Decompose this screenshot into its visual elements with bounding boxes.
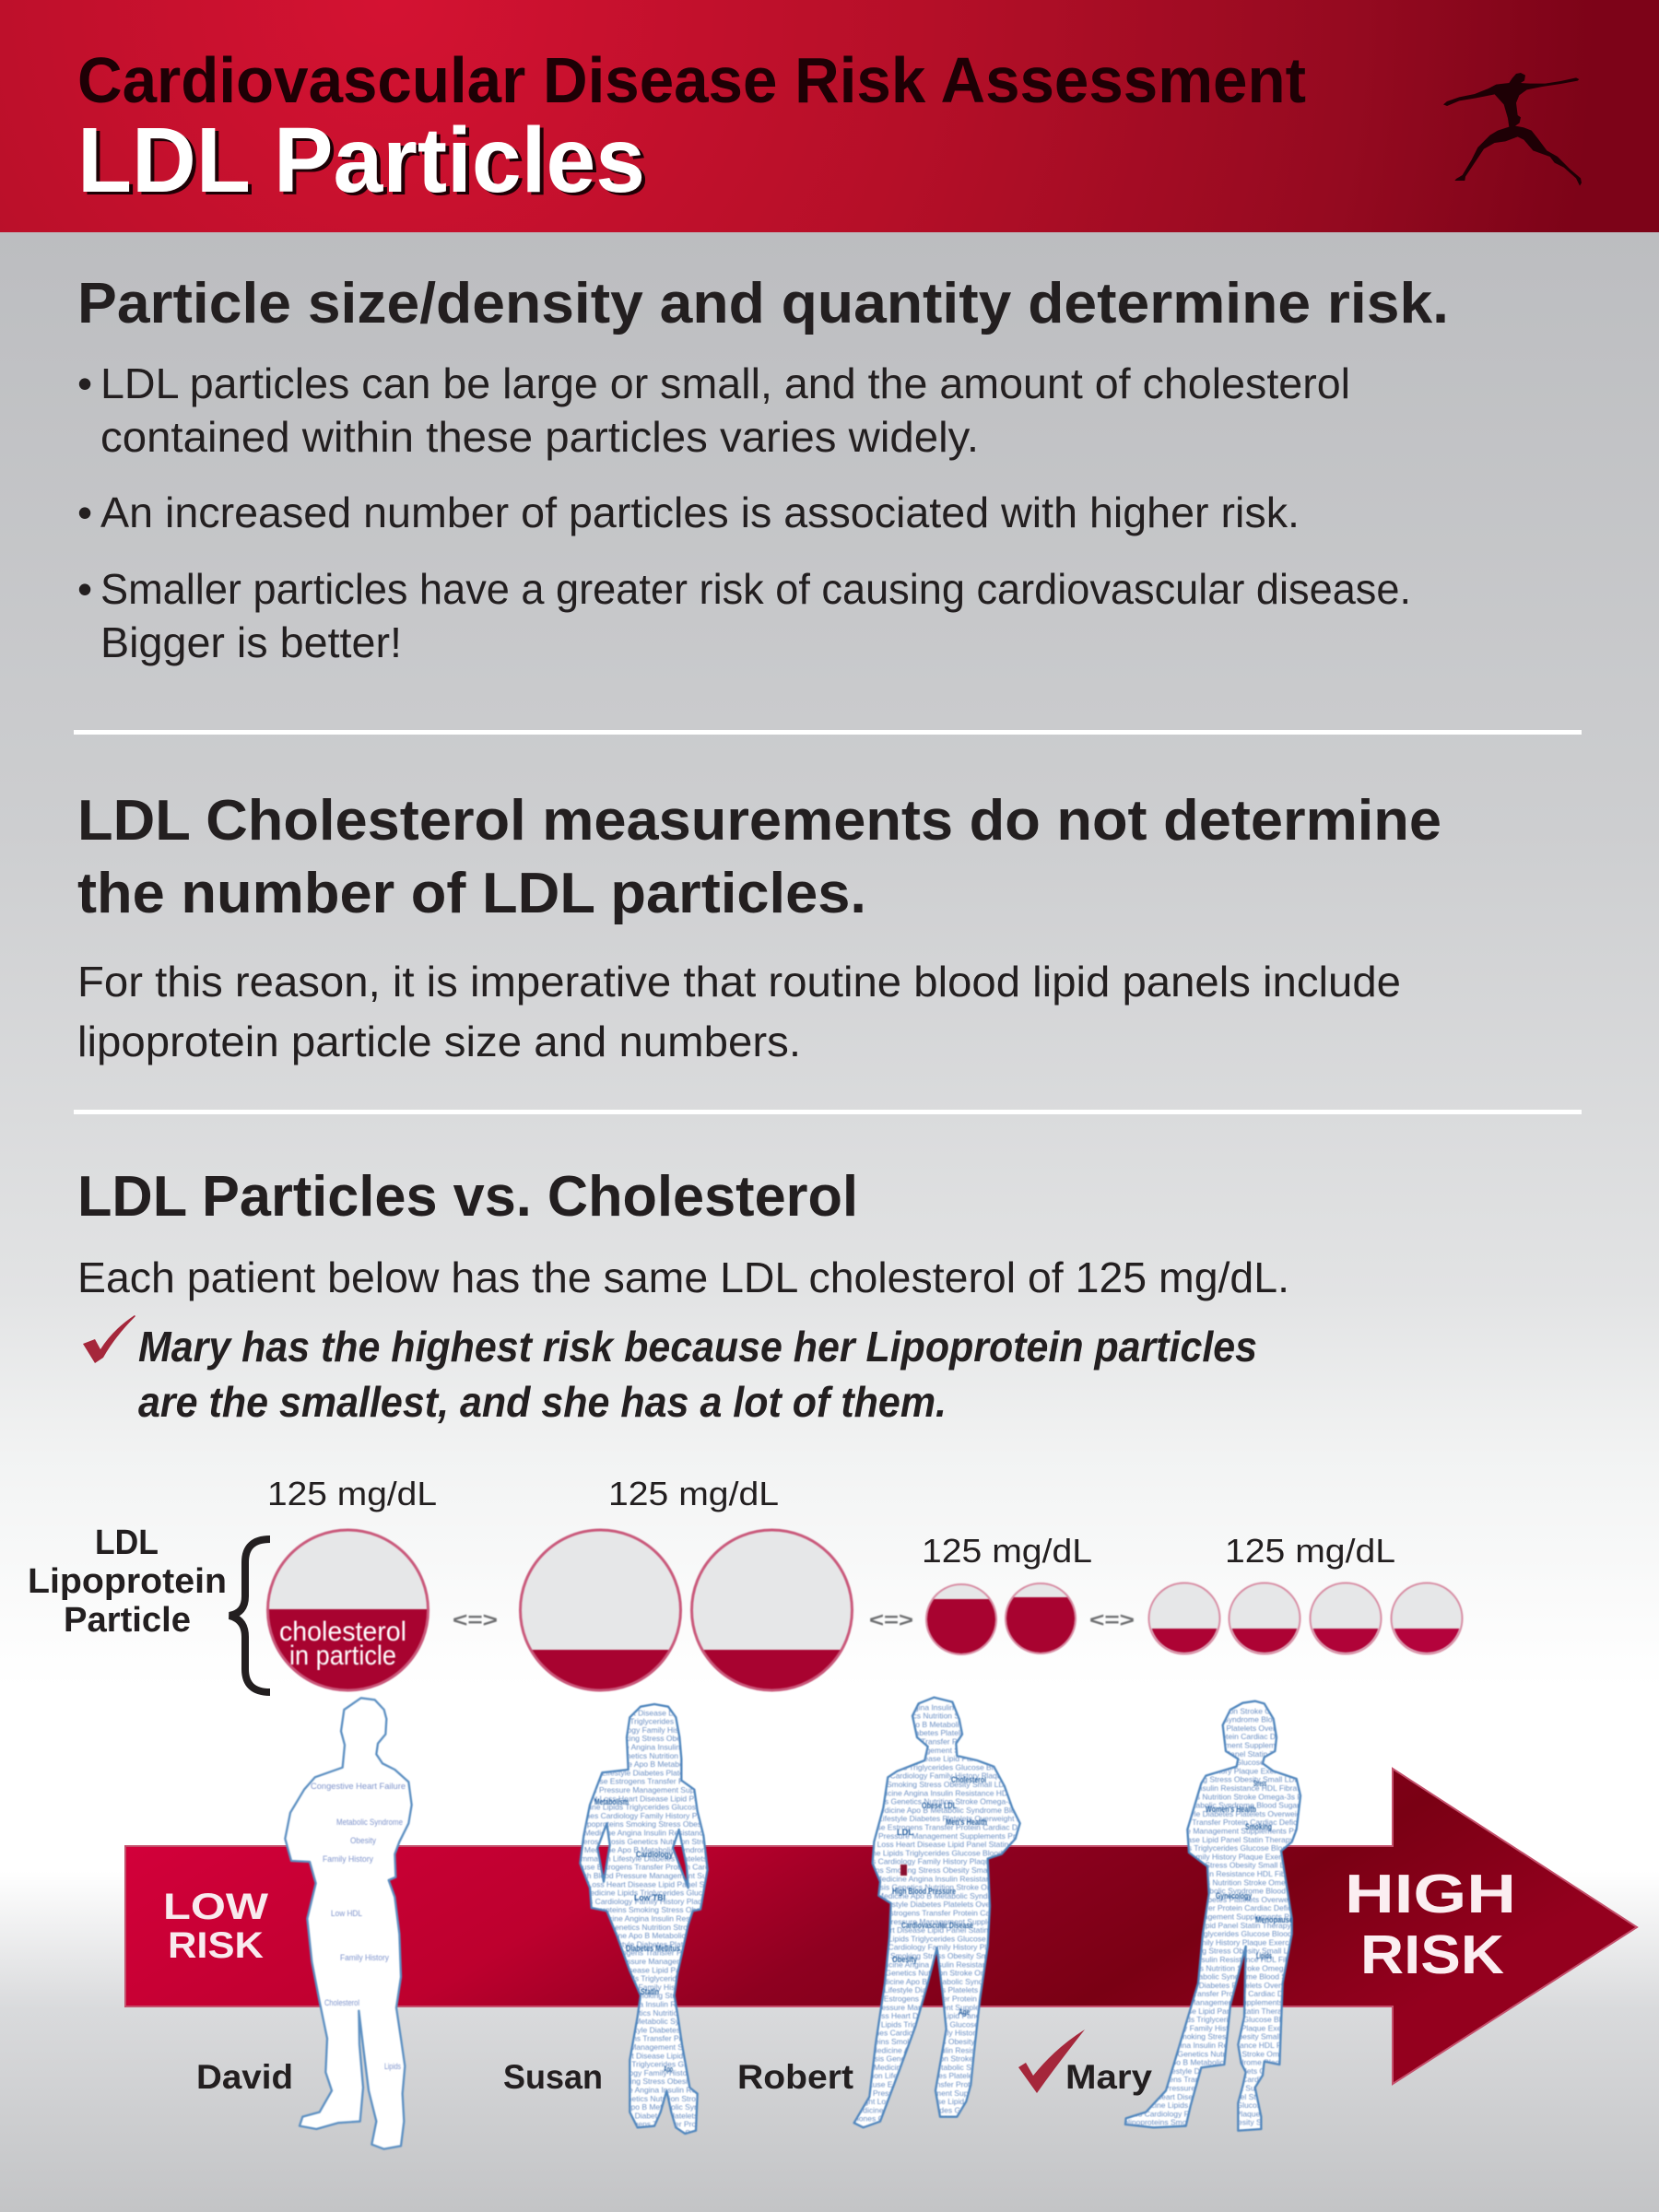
bullet list: • bbox=[77, 488, 92, 536]
figure: Susan silhouette with risk-factor words: Diet Medicine Lipids Triglycerides Glucose Blood Clots bbox=[558, 1717, 747, 1726]
figure: Susan silhouette with risk-factor words: Atherosclerosis Genetics Nutrition Stroke Omega-3s Fat bbox=[561, 2094, 757, 2103]
figure: Robert silhouette with risk-factor words: Weight Loss Heart Disease Lipid Panel Statin Therapy Risk Exercise bbox=[851, 1840, 1089, 1849]
figure: Susan silhouette with risk-factor words: Atherosclerosis Genetics Nutrition Stroke Omega-3s Fat bbox=[560, 1751, 756, 1760]
figure: Robert silhouette with risk-factor words: Atherosclerosis Genetics Nutrition Stroke Omega-3s Fat Statin bbox=[830, 1969, 1047, 1978]
figure: Robert silhouette with risk-factor words: Cholesterol bbox=[951, 1775, 986, 1784]
figure: Mary silhouette with risk-factor words: High Blood Pressure Management Supplements Preventive Care LDL HDL bbox=[1119, 1827, 1379, 1836]
label: 125 mg/dL: 125 mg/dL bbox=[1225, 1532, 1395, 1570]
body text: lipoprotein particle size and numbers. bbox=[77, 1018, 801, 1065]
figure: Susan silhouette with risk-factor words: Sports Medicine Apo B Metabolic Syndrome Blood Sugar Risk bbox=[571, 1931, 787, 1940]
figure: Susan silhouette with risk-factor words: Menopause Estrogens Transfer Protein Cardiac Deficiency bbox=[554, 1863, 759, 1872]
figure: Susan silhouette with risk-factor words: Inflammation Lifestyle Diabetes Platelets Overweight BMI bbox=[557, 2111, 756, 2120]
low risk label: LOW bbox=[163, 1887, 268, 1927]
figure: Robert silhouette with risk-factor words: Atherosclerosis Genetics Nutrition Stroke Omega-3s Fat Statin bbox=[835, 1797, 1053, 1806]
figure: Robert silhouette with risk-factor words: Hormones Cardiology Family History Plaque Exercise Age Genetics bbox=[850, 1943, 1085, 1952]
cholesterol label: in particle bbox=[289, 1641, 396, 1671]
figure: Mary silhouette with risk-factor words: Atherosclerosis Genetics Nutrition Stroke Omega-3s Fat Statin Risk Lipid bbox=[1124, 1877, 1377, 1887]
figure: Mary silhouette with risk-factor words: Diet Medicine Lipids Triglycerides Glucose Blood Clots Smoking Hormones bbox=[1123, 1929, 1383, 1938]
figure: Robert silhouette with risk-factor words: Hormones Cardiology Family History Plaque Exercise Age Genetics bbox=[840, 1857, 1075, 1866]
bullet list: An increased number of particles is associated with higher risk. bbox=[100, 488, 1300, 536]
figure: Mary silhouette with risk-factor words: Menopause Estrogens Transfer Protein Cardiac Deficiency Obesity Angina bbox=[1103, 2075, 1362, 2084]
icon: leaping figure logo bbox=[1443, 73, 1582, 186]
figure: Mary silhouette with risk-factor words: Inflammation Lifestyle Diabetes Platelets Overweight BMI Plaque Cardio bbox=[1115, 1724, 1366, 1733]
figure: Mary silhouette with risk-factor words: Hormones Cardiology Family History Plaque Exercise Age Genetics Stress bbox=[1112, 1937, 1372, 1947]
LDL lipoprotein particle label: Particle bbox=[64, 1601, 191, 1640]
figure: Mary silhouette with risk-factor words: Internal Medicine Angina Insulin Resistance HDL Fibrate Lipid Stroke Age bbox=[1105, 2041, 1360, 2050]
figure: Susan silhouette with risk-factor words: Sports Medicine Apo B Metabolic Syndrome Blood Sugar Risk bbox=[559, 1845, 776, 1854]
figure: Mary silhouette with risk-factor words: Diet Medicine Lipids Triglycerides Glucose Blood Clots Smoking Hormones bbox=[1124, 2015, 1385, 2024]
figure: Mary silhouette with risk-factor words: Sports Medicine Apo B Metabolic Syndrome Blood Sugar Risk Age Plaque Diet bbox=[1106, 1715, 1381, 1724]
section: LDL cholesterol measurements bbox=[77, 789, 1441, 1065]
figure: Robert silhouette with risk-factor words: Inflammation Lifestyle Diabetes Platelets Overweight BMI Plaque bbox=[831, 1814, 1057, 1823]
figure: Mary silhouette with risk-factor words: Stress bbox=[1253, 1779, 1266, 1788]
figure: Mary silhouette with risk-factor words: Weight Loss Heart Disease Lipid Panel Statin Therapy Risk Exercise Glucose bbox=[1101, 2006, 1371, 2016]
figure: Susan silhouette with risk-factor words: Internal Medicine Angina Insulin Resistance HDL Fibrate bbox=[563, 1913, 759, 1923]
low risk label bbox=[163, 1887, 268, 1966]
icon: check mark bbox=[83, 1315, 135, 1363]
patient name: Mary: Mary bbox=[1065, 2058, 1152, 2096]
callout: Mary has highest risk bbox=[138, 1323, 1257, 1426]
figure: David silhouette: Lipids bbox=[384, 2062, 401, 2071]
figure: Susan silhouette with risk-factor words: Hormones Cardiology Family History Plaque Exercise Age bbox=[566, 2068, 768, 2077]
figure: Susan silhouette with risk-factor words: Sports Medicine Apo B Metabolic Syndrome Blood Sugar Risk bbox=[568, 2102, 784, 2112]
heading: the number of LDL particles. bbox=[77, 862, 866, 925]
figure: Robert silhouette with risk-factor words: High Blood Pressure Management Supplements Preventive Care LDL bbox=[838, 1831, 1080, 1841]
figure: Susan silhouette with risk-factor words: Atherosclerosis Genetics Nutrition Stroke Omega-3s Fat bbox=[571, 1837, 767, 1846]
figure: Susan silhouette with risk-factor words: Weight Loss Heart Disease Lipid Panel Statin Therapy Risk bbox=[555, 1965, 761, 1974]
patient name: Robert: Robert bbox=[737, 2058, 853, 2096]
figure: Robert silhouette with risk-factor words: Diet Medicine Lipids Triglycerides Glucose Blood Clots Smoking bbox=[837, 1762, 1059, 1771]
figure: Susan silhouette with risk-factor words: Hormones Cardiology Family History Plaque Exercise Age bbox=[557, 1897, 759, 1906]
figure: Susan silhouette with risk-factor words: Menopause Estrogens Transfer Protein Cardiac Deficiency bbox=[562, 2034, 767, 2043]
figure: Robert silhouette with risk-factor words: Inflammation Lifestyle Diabetes Platelets Overweight BMI Plaque bbox=[838, 2071, 1064, 2080]
bullet list bbox=[77, 359, 1411, 666]
figure: Robert silhouette with risk-factor words: Inflammation Lifestyle Diabetes Platelets Overweight BMI Plaque bbox=[830, 1728, 1055, 1737]
figure: Mary silhouette with risk-factor words: Sports Medicine Apo B Metabolic Syndrome Blood Sugar Risk Age Plaque Diet bbox=[1111, 1887, 1385, 1896]
figure: Susan silhouette with risk-factor words: Weight Loss Heart Disease Lipid Panel Statin Therapy Risk bbox=[570, 2051, 776, 2060]
figure: Susan silhouette with risk-factor words: Apolipoproteins Smoking Stress Obesity Small LDL Risk bbox=[572, 1905, 769, 1914]
figure: Robert silhouette with risk-factor words: Hormones Cardiology Family History Plaque Exercise Age Genetics bbox=[852, 2029, 1087, 2038]
particle group: Susan bbox=[516, 1475, 857, 1696]
figure: Mary silhouette with risk-factor words: Internal Medicine Angina Insulin Resistance HDL Fibrate Lipid Stroke Age bbox=[1102, 2126, 1358, 2136]
figure: Mary silhouette with risk-factor words: Atherosclerosis Genetics Nutrition Stroke Omega-3s Fat Statin Risk Lipid bbox=[1120, 1706, 1373, 1715]
figure: Robert silhouette with risk-factor words: Sports Medicine Apo B Metabolic Syndrome Blood Sugar Risk Age bbox=[849, 1806, 1080, 1815]
figure: Robert silhouette with risk-factor words: Apolipoproteins Smoking Stress Obesity Small LDL Risk Nutrition bbox=[835, 2037, 1062, 2046]
brace bbox=[229, 1539, 270, 1692]
label: 125 mg/dL: 125 mg/dL bbox=[922, 1532, 1092, 1570]
figure: Robert silhouette with risk-factor words: LDL bbox=[897, 1828, 914, 1837]
figure: Robert silhouette with risk-factor words: High Blood Pressure bbox=[892, 1887, 956, 1896]
figure: Susan silhouette with risk-factor words: Diet Medicine Lipids Triglycerides Glucose Blood Clots bbox=[568, 1888, 758, 1898]
figure: Robert silhouette with risk-factor words: Weight Loss Heart Disease Lipid Panel Statin Therapy Risk Exercise bbox=[846, 1754, 1085, 1763]
figure: Susan silhouette with risk-factor words: Apolipoproteins Smoking Stress Obesity Small LDL Risk bbox=[554, 2077, 750, 2086]
figure: Robert silhouette with risk-factor words: Weight Loss Heart Disease Lipid Panel Statin Therapy Risk Exercise bbox=[851, 2097, 1089, 2106]
figure: Robert silhouette with risk-factor words: Sports Medicine Apo B Metabolic Syndrome Blood Sugar Risk Age bbox=[849, 2063, 1080, 2072]
figure: David silhouette: Congestive Heart Failure bbox=[311, 1782, 406, 1791]
large particle bbox=[263, 1530, 433, 1697]
figure: Robert silhouette with risk-factor words: Sports Medicine Apo B Metabolic Syndrome Blood Sugar Risk Age bbox=[853, 1891, 1084, 1900]
figure: Robert silhouette with risk-factor words: Menopause Estrogens Transfer Protein Cardiac Deficiency Obesity bbox=[844, 1823, 1077, 1832]
figure: Mary silhouette with risk-factor words: High Blood Pressure Management Supplements Preventive Care LDL HDL bbox=[1124, 2083, 1383, 2092]
figure: Robert silhouette with risk-factor words: Apolipoproteins Smoking Stress Obesity Small LDL Risk Nutrition bbox=[830, 1865, 1056, 1875]
figure: Susan silhouette with risk-factor words: Diet Medicine Lipids Triglycerides Glucose Blood Clots bbox=[569, 1974, 759, 1983]
figure: Robert silhouette with risk-factor words: Diet Medicine Lipids Triglycerides Glucose Blood Clots Smoking bbox=[836, 2105, 1058, 2114]
figure: Mary silhouette with risk-factor words: Internal Medicine Angina Insulin Resistance HDL Fibrate Lipid Stroke Age bbox=[1108, 1783, 1363, 1793]
figure: Susan silhouette with risk-factor words: Internal Medicine Angina Insulin Resistance HDL Fibrate bbox=[570, 1742, 766, 1751]
figure: Mary silhouette with risk-factor words: Hormones Cardiology Family History Plaque Exercise Age Genetics Stress bbox=[1106, 2109, 1366, 2118]
bullet list: Bigger is better! bbox=[100, 618, 402, 666]
figure: Mary silhouette with risk-factor words: Weight Loss Heart Disease Lipid Panel Statin Therapy Risk Exercise Glucose bbox=[1105, 1835, 1374, 1844]
figure: Susan silhouette with risk-factor words: Hormones Cardiology Family History Plaque Exercise Age bbox=[560, 1983, 762, 1992]
patient name: Susan: Susan bbox=[503, 2058, 603, 2096]
figure: Mary silhouette with risk-factor words: Apolipoproteins Smoking Stress Obesity Small LDL Risk Nutrition Fibrate bbox=[1119, 2032, 1372, 2041]
figure: Mary silhouette with risk-factor words: Apolipoproteins Smoking Stress Obesity Small LDL Risk Nutrition Fibrate bbox=[1120, 1947, 1373, 1956]
figure: Robert silhouette with risk-factor words: Sports Medicine Apo B Metabolic Syndrome Blood Sugar Risk Age bbox=[848, 1720, 1079, 1729]
figure: Susan silhouette with risk-factor words: Inflammation Lifestyle Diabetes Platelets Overweight BMI bbox=[571, 2025, 771, 2034]
figure: Mary silhouette with risk-factor words: Hormones Cardiology Family History Plaque Exercise Age Genetics Stress bbox=[1112, 2023, 1371, 2032]
bullet list: • bbox=[77, 359, 92, 407]
particle group: Robert bbox=[922, 1532, 1092, 1659]
section: particles vs cholesterol bbox=[77, 1165, 1289, 1426]
figure: Robert silhouette with risk-factor words: Diet Medicine Lipids Triglycerides Glucose Blood Clots Smoking bbox=[839, 1934, 1061, 1943]
figure: Mary silhouette with risk-factor words: Hormones Cardiology Family History Plaque Exercise Age Genetics Stress bbox=[1109, 1852, 1369, 1861]
heading: Particle size/density and quantity determine risk. bbox=[77, 272, 1449, 335]
figure: Susan silhouette with risk-factor words: Weight Loss Heart Disease Lipid Panel Statin Therapy Risk bbox=[573, 1794, 780, 1803]
section: particle size and quantity bbox=[77, 272, 1449, 666]
figure: Robert silhouette with risk-factor words: Menopause Estrogens Transfer Protein Cardiac Deficiency Obesity bbox=[844, 2079, 1077, 2088]
figure: Mary silhouette with risk-factor words: Menopause Estrogens Transfer Protein Cardiac Deficiency Obesity Angina bbox=[1102, 1732, 1361, 1741]
figure: David silhouette: Obesity bbox=[350, 1836, 376, 1845]
figure: Mary silhouette with risk-factor words: Apolipoproteins Smoking Stress Obesity Small LDL Risk Nutrition Fibrate bbox=[1116, 1861, 1370, 1870]
bullet list: • bbox=[77, 565, 92, 613]
body text bbox=[77, 958, 1401, 1065]
figure: Robert silhouette with risk-factor words: Internal Medicine Angina Insulin Resistance HDL Fibrate Lipid bbox=[847, 1874, 1062, 1883]
figure: David silhouette bbox=[285, 1698, 412, 2149]
heading: LDL Cholesterol measurements do not determine bbox=[77, 789, 1441, 853]
cholesterol label: cholesterol bbox=[279, 1617, 406, 1647]
high risk label: HIGH bbox=[1345, 1864, 1516, 1924]
figure: Susan silhouette with risk-factor words: Sports Medicine Apo B Metabolic Syndrome Blood Sugar Risk bbox=[576, 1759, 793, 1769]
supertitle: Cardiovascular Disease Risk Assessment bbox=[77, 44, 1306, 116]
figure: Mary silhouette with risk-factor words: High Blood Pressure Management Supplements Preventive Care LDL HDL bbox=[1114, 1912, 1374, 1921]
figure: David silhouette: Metabolic Syndrome bbox=[336, 1818, 403, 1827]
high risk label: RISK bbox=[1360, 1924, 1504, 1985]
figure: Mary silhouette with risk-factor words: Atherosclerosis Genetics Nutrition Stroke Omega-3s Fat Statin Risk Lipid bbox=[1117, 1963, 1371, 1972]
figure: Susan silhouette with risk-factor words: Menopause Estrogens Transfer Protein Cardiac Deficiency bbox=[565, 1948, 770, 1958]
small particle bbox=[1306, 1583, 1385, 1659]
heading bbox=[77, 789, 1441, 925]
figure: Robert silhouette with risk-factor words: High Blood Pressure Management Supplements Preventive Care LDL bbox=[845, 1917, 1088, 1926]
patient name: David: David bbox=[196, 2058, 293, 2096]
figure: Mary silhouette with risk-factor words: Menopause bbox=[1255, 1915, 1293, 1924]
figure: David silhouette: Family History bbox=[323, 1854, 373, 1864]
figure: Mary silhouette with risk-factor words: Inflammation Lifestyle Diabetes Platelets Overweight BMI Plaque Cardio bbox=[1118, 1895, 1369, 1904]
bullet list: LDL particles can be large or small, and the amount of cholesterol bbox=[100, 359, 1350, 407]
figure: Mary silhouette with risk-factor words: Women's Health bbox=[1206, 1805, 1256, 1814]
figure: Robert silhouette with risk-factor words: Atherosclerosis Genetics Nutrition Stroke Omega-3s Fat Statin bbox=[830, 2054, 1048, 2064]
figure: Robert silhouette with risk-factor words: Internal Medicine Angina Insulin Resistance HDL Fibrate Lipid bbox=[842, 1788, 1057, 1797]
small particle bbox=[922, 1584, 1001, 1659]
figure: Robert silhouette with risk-factor words: Diet Medicine Lipids Triglycerides Glucose Blood Clots Smoking bbox=[833, 1848, 1055, 1857]
figure: Susan silhouette with risk-factor words: Diet Medicine Lipids Triglycerides Glucose Blood Clots bbox=[553, 1803, 743, 1812]
figure: Mary silhouette with risk-factor words: Apolipoproteins Smoking Stress Obesity Small LDL Risk Nutrition Fibrate bbox=[1114, 2118, 1368, 2127]
large particle bbox=[687, 1530, 857, 1696]
figure: Susan silhouette with risk-factor words: Inflammation Lifestyle Diabetes Platelets Overweight BMI bbox=[559, 1939, 758, 1948]
figure: Mary silhouette with risk-factor words: Menopause Estrogens Transfer Protein Cardiac Deficiency Obesity Angina bbox=[1106, 1903, 1365, 1912]
figure: Mary silhouette with risk-factor words: Sports Medicine Apo B Metabolic Syndrome Blood Sugar Risk Age Plaque Diet bbox=[1101, 1801, 1376, 1810]
icon: check mark for Mary bbox=[1018, 2030, 1085, 2093]
figure: Susan silhouette with risk-factor words: Metabolism bbox=[594, 1797, 629, 1806]
small particle bbox=[1387, 1583, 1466, 1659]
figure: Robert silhouette with risk-factor words: Menopause Estrogens Transfer Protein Cardiac Deficiency Obesity bbox=[841, 1908, 1075, 1917]
figure: Susan silhouette with risk-factor words: Apolipoproteins Smoking Stress Obesity Small LDL Risk bbox=[553, 1734, 749, 1743]
particle group: Mary bbox=[1145, 1532, 1466, 1659]
figure: Mary silhouette with risk-factor words: Menopause Estrogens Transfer Protein Cardiac Deficiency Obesity Angina bbox=[1110, 1989, 1369, 1998]
large particle bbox=[516, 1530, 687, 1696]
figure: Susan silhouette with risk-factor words: Atherosclerosis Genetics Nutrition Stroke Omega-3s Fat bbox=[553, 1923, 748, 1932]
figure: Mary silhouette with risk-factor words: Inflammation Lifestyle Diabetes Platelets Overweight BMI Plaque Cardio bbox=[1124, 1809, 1375, 1818]
figure: Robert silhouette with risk-factor words: Inflammation Lifestyle Diabetes Platelets Overweight BMI Plaque bbox=[832, 1900, 1058, 1909]
particle group: David bbox=[263, 1475, 437, 1697]
figure: Robert silhouette with risk-factor words: Menopause Estrogens Transfer Protein Cardiac Deficiency Obesity bbox=[841, 1736, 1074, 1746]
figure: Mary silhouette with risk-factor words: Smoking bbox=[1245, 1822, 1272, 1831]
figure: Susan silhouette with risk-factor words: Apo bbox=[664, 2065, 673, 2074]
figure: Mary silhouette with risk-factor words: Atherosclerosis Genetics Nutrition Stroke Omega-3s Fat Statin Risk Lipid bbox=[1122, 2049, 1375, 2058]
figure: Mary silhouette with risk-factor words: Atherosclerosis Genetics Nutrition Stroke Omega-3s Fat Statin Risk Lipid bbox=[1113, 1792, 1367, 1801]
figure: Mary silhouette with risk-factor words: Diet Medicine Lipids Triglycerides Glucose Blood Clots Smoking Hormones bbox=[1118, 2100, 1379, 2110]
figure: Mary silhouette with risk-factor words: Weight Loss Heart Disease Lipid Panel Statin Therapy Risk Exercise Glucose bbox=[1110, 1749, 1379, 1759]
figure: Robert silhouette with risk-factor words: High Blood Pressure Management Supplements Preventive Care LDL bbox=[832, 1746, 1075, 1755]
figure: David silhouette: Low HDL bbox=[331, 1909, 362, 1918]
figure: Mary silhouette with risk-factor words: Diet Medicine Lipids Triglycerides Glucose Blood Clots Smoking Hormones bbox=[1117, 1758, 1378, 1767]
main title: LDL Particles bbox=[77, 109, 645, 212]
figure: Robert silhouette with risk-factor words: Inflammation Lifestyle Diabetes Platelets Overweight BMI Plaque bbox=[837, 1985, 1063, 1994]
figure: Mary silhouette with risk-factor words: High Blood Pressure Management Supplements Preventive Care LDL HDL bbox=[1115, 1998, 1375, 2007]
figure: Robert silhouette with risk-factor words: Obese LDL bbox=[922, 1801, 957, 1810]
cholesterol label bbox=[279, 1617, 406, 1671]
figure: Mary silhouette with risk-factor words: Diet Medicine Lipids Triglycerides Glucose Blood Clots Smoking Hormones bbox=[1122, 1843, 1382, 1853]
bullet list: Smaller particles have a greater risk of causing cardiovascular disease. bbox=[100, 565, 1411, 613]
callout: Mary has highest risk: Mary has the highest risk because her Lipoprotein particles bbox=[138, 1323, 1257, 1371]
intro text: Each patient below has the same LDL cholesterol of 125 mg/dL. bbox=[77, 1253, 1289, 1301]
figure: Susan silhouette with risk-factor words: High Blood Pressure Management Supplements Preventive Care bbox=[563, 2128, 789, 2137]
figure: Robert silhouette with risk-factor words: Age bbox=[959, 2007, 970, 2017]
figure: Robert silhouette with risk-factor words: Internal Medicine Angina Insulin Resistance HDL Fibrate Lipid bbox=[842, 2045, 1057, 2054]
figure: Susan silhouette with risk-factor words: High Blood Pressure Management Supplements Preventive Care bbox=[575, 1871, 801, 1880]
figure: Mary silhouette with risk-factor words: Hormones Cardiology Family History Plaque Exercise Age Genetics Stress bbox=[1104, 1766, 1364, 1775]
small particle bbox=[1225, 1583, 1304, 1659]
equivalence sign: <=> bbox=[453, 1608, 498, 1631]
small particle bbox=[1001, 1583, 1080, 1657]
figure: Robert silhouette with risk-factor words: Cardiovascular Disease bbox=[901, 1921, 973, 1930]
figure: Robert silhouette with risk-factor words: Weight Loss Heart Disease Lipid Panel Statin Therapy Risk Exercise bbox=[830, 1925, 1069, 1935]
figure: Mary silhouette with risk-factor words: Internal Medicine Angina Insulin Resistance HDL Fibrate Lipid Stroke Age bbox=[1103, 1869, 1359, 1878]
low risk label: RISK bbox=[168, 1925, 264, 1966]
figure: Mary silhouette with risk-factor words: Apolipoproteins Smoking Stress Obesity Small LDL Risk Nutrition Fibrate bbox=[1121, 1775, 1374, 1784]
figure: Robert silhouette with risk-factor words: Obesity bbox=[892, 1955, 917, 1964]
figure: Susan silhouette with risk-factor words: Apolipoproteins Smoking Stress Obesity Small LDL Risk bbox=[576, 1991, 772, 2000]
figure: Susan silhouette with risk-factor words: Apolipoproteins Smoking Stress Obesity Small LDL Risk bbox=[570, 1819, 766, 1829]
risk arrow bbox=[125, 1769, 1637, 2084]
header banner bbox=[0, 0, 1659, 232]
figure: Mary silhouette with risk-factor words: Gynecology bbox=[1216, 1891, 1252, 1900]
figure: Mary silhouette with risk-factor words: Menopause Estrogens Transfer Protein Cardiac Deficiency Obesity Angina bbox=[1112, 1818, 1371, 1827]
figure: Susan silhouette with risk-factor words: Menopause Estrogens Transfer Protein Cardiac Deficiency bbox=[567, 1777, 771, 1786]
figure: Mary silhouette with risk-factor words bbox=[1124, 1700, 1302, 2133]
label: 125 mg/dL: 125 mg/dL bbox=[608, 1475, 779, 1512]
figure: Susan silhouette with risk-factor words: Inflammation Lifestyle Diabetes Platelets Overweight BMI bbox=[566, 1853, 765, 1863]
figure: Mary silhouette with risk-factor words: Weight Loss Heart Disease Lipid Panel Statin Therapy Risk Exercise Glucose bbox=[1102, 1921, 1371, 1930]
body text: For this reason, it is imperative that routine blood lipid panels include bbox=[77, 958, 1401, 1006]
small particle bbox=[1145, 1583, 1224, 1659]
figure: Robert silhouette with risk-factor words: Atherosclerosis Genetics Nutrition Stroke Omega-3s Fat Statin bbox=[834, 1712, 1052, 1721]
figure: Susan silhouette with risk-factor words: High Blood Pressure Management Supplements Preventive Care bbox=[574, 1957, 800, 1966]
figure: Robert silhouette with risk-factor words: Internal Medicine Angina Insulin Resistance HDL Fibrate Lipid bbox=[843, 1959, 1058, 1969]
figure: Robert silhouette with risk-factor words: Sports Medicine Apo B Metabolic Syndrome Blood Sugar Risk Age bbox=[848, 1977, 1079, 1986]
equivalence sign: <=> bbox=[1089, 1608, 1135, 1631]
figure: David silhouette: Family History bbox=[340, 1953, 389, 1962]
label: 125 mg/dL: 125 mg/dL bbox=[267, 1475, 437, 1512]
figure: Robert silhouette with risk-factor words: Diet Medicine Lipids Triglycerides Glucose Blood Clots Smoking bbox=[831, 2019, 1053, 2029]
figure: Susan silhouette with risk-factor words: Diabetes Mellitus bbox=[626, 1944, 680, 1953]
figure: Susan silhouette with risk-factor words: Weight Loss Heart Disease Lipid Panel Statin Therapy Risk bbox=[561, 1879, 768, 1888]
figure: Susan silhouette with risk-factor words: Internal Medicine Angina Insulin Resistance HDL Fibrate bbox=[573, 2085, 770, 2094]
figure: Robert silhouette with risk-factor words: Hormones Cardiology Family History Plaque Exercise Age Genetics bbox=[840, 2114, 1075, 2124]
figure: Susan silhouette with risk-factor words: Statin bbox=[641, 1987, 659, 1996]
figure: Susan silhouette with risk-factor words: Hormones Cardiology Family History Plaque Exercise Age bbox=[562, 1811, 764, 1820]
figure: Susan silhouette with risk-factor words: Internal Medicine Angina Insulin Resistance HDL Fibrate bbox=[558, 2000, 754, 2009]
figure: Robert silhouette with risk-factor words: Apolipoproteins Smoking Stress Obesity Small LDL Risk Nutrition bbox=[834, 1951, 1061, 1960]
figure: Susan silhouette with risk-factor words: Diet Medicine Lipids Triglycerides Glucose Blood Clots bbox=[559, 2060, 749, 2069]
figure: Robert silhouette with risk-factor words: Internal Medicine Angina Insulin Resistance HDL Fibrate Lipid bbox=[843, 1702, 1058, 1712]
figure: Robert silhouette with risk-factor words: Weight Loss Heart Disease Lipid Panel Statin Therapy Risk Exercise bbox=[846, 2011, 1085, 2020]
figure: Susan silhouette with risk-factor words: Inflammation Lifestyle Diabetes Platelets Overweight BMI bbox=[555, 1768, 754, 1777]
figure: Robert silhouette with risk-factor words: Apolipoproteins Smoking Stress Obesity Small LDL Risk Nutrition bbox=[830, 1780, 1057, 1789]
figure: Robert silhouette with risk-factor words bbox=[852, 1696, 1021, 2129]
figure: Mary silhouette with risk-factor words: High Blood Pressure Management Supplements Preventive Care LDL HDL bbox=[1123, 1740, 1382, 1749]
figure: Susan silhouette with risk-factor words: Internal Medicine Angina Insulin Resistance HDL Fibrate bbox=[556, 1829, 752, 1838]
figure: Susan silhouette with risk-factor words: Atherosclerosis Genetics Nutrition Stroke Omega-3s Fat bbox=[564, 2008, 759, 2018]
figure: Mary silhouette with risk-factor words: Inflammation Lifestyle Diabetes Platelets Overweight BMI Plaque Cardio bbox=[1121, 1981, 1371, 1990]
figure: Robert silhouette with risk-factor words: High Blood Pressure Management Supplements Preventive Care LDL bbox=[832, 2088, 1075, 2098]
figure: David silhouette: Cholesterol bbox=[324, 1998, 359, 2007]
figure: Susan silhouette with risk-factor words: Low TBI bbox=[634, 1893, 665, 1902]
figure: Robert silhouette with risk-factor words: Menopause Estrogens Transfer Protein Cardiac Deficiency Obesity bbox=[841, 1994, 1074, 2004]
callout: Mary has highest risk: are the smallest, and she has a lot of them. bbox=[138, 1378, 947, 1426]
figure: Susan silhouette with risk-factor words: Menopause Estrogens Transfer Protein Cardiac Deficiency bbox=[572, 2120, 777, 2129]
figure: Robert silhouette with risk-factor words: Atherosclerosis Genetics Nutrition Stroke Omega-3s Fat Statin bbox=[836, 1883, 1053, 1892]
figure: Susan silhouette with risk-factor words: High Blood Pressure Management Supplements Preventive Care bbox=[556, 2042, 782, 2052]
figure: Susan silhouette with risk-factor words bbox=[579, 1702, 710, 2136]
figure: Susan silhouette with risk-factor words: Hormones Cardiology Family History Plaque Exercise Age bbox=[564, 1725, 766, 1735]
equivalence sign: <=> bbox=[869, 1608, 913, 1631]
figure: Susan silhouette with risk-factor words: Sports Medicine Apo B Metabolic Syndrome Blood Sugar Risk bbox=[553, 2017, 770, 2026]
LDL lipoprotein particle label bbox=[28, 1524, 227, 1640]
heading: LDL Particles vs. Cholesterol bbox=[77, 1165, 858, 1229]
LDL lipoprotein particle label: Lipoprotein bbox=[28, 1562, 227, 1601]
figure: Susan silhouette with risk-factor words: Weight Loss Heart Disease Lipid Panel Statin Therapy Risk bbox=[571, 1708, 778, 1717]
figure: Mary silhouette with risk-factor words: Inflammation Lifestyle Diabetes Platelets Overweight BMI Plaque Cardio bbox=[1116, 2066, 1367, 2076]
figure: Mary silhouette with risk-factor words: Sports Medicine Apo B Metabolic Syndrome Blood Sugar Risk Age Plaque Diet bbox=[1109, 2058, 1383, 2067]
figure: Mary silhouette with risk-factor words: Lipids bbox=[1256, 1951, 1272, 1960]
figure: Mary silhouette with risk-factor words: Internal Medicine Angina Insulin Resistance HDL Fibrate Lipid Stroke Age bbox=[1107, 1955, 1362, 1964]
figure: Mary silhouette with risk-factor words: Weight Loss Heart Disease Lipid Panel Statin Therapy Risk Exercise Glucose bbox=[1111, 2092, 1380, 2101]
figure: Robert silhouette with risk-factor words: Hormones Cardiology Family History Plaque Exercise Age Genetics bbox=[852, 1771, 1087, 1781]
figure: Mary silhouette with risk-factor words: Sports Medicine Apo B Metabolic Syndrome Blood Sugar Risk Age Plaque Diet bbox=[1104, 1972, 1379, 1982]
LDL lipoprotein particle label: LDL bbox=[95, 1524, 159, 1562]
figure: Susan silhouette with risk-factor words: High Blood Pressure Management Supplements Preventive Care bbox=[559, 1785, 784, 1794]
high risk label bbox=[1345, 1864, 1516, 1985]
figure: Robert silhouette with risk-factor words: High Blood Pressure Management Supplements Preventive Care LDL bbox=[833, 2003, 1076, 2012]
figure: Robert silhouette with risk-factor words: Apolipoproteins Smoking Stress Obesity Small LDL Risk Nutrition bbox=[830, 2123, 1056, 2132]
figure: Susan silhouette with risk-factor words: Cardiology bbox=[636, 1850, 673, 1859]
figure: Robert silhouette with risk-factor words: Men's Health bbox=[946, 1818, 987, 1827]
bullet list: contained within these particles varies widely. bbox=[100, 413, 979, 461]
